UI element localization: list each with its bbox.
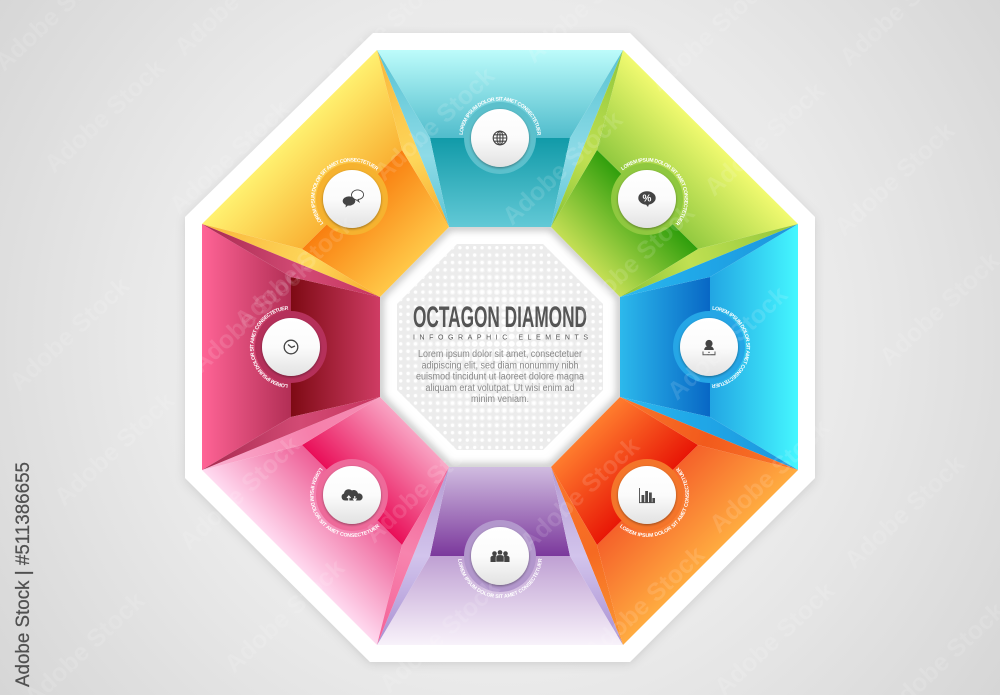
watermarks: Adobe Stock (4, 272, 135, 396)
badge: person (673, 306, 750, 388)
icon: person at laptop (702, 340, 716, 355)
watermarks: Adobe Stock (174, 431, 305, 555)
badge: globe: LOREM IPSUM DOLOR SIT AMET CONSECTETUER (459, 96, 541, 136)
stock id label: Adobe Stock | #511386655 (13, 462, 34, 687)
icon: people (490, 550, 510, 562)
centre panel (380, 227, 620, 467)
subtitle: INFOGRAPHIC ELEMENTS (413, 334, 588, 342)
panel: green top-right (551, 50, 798, 297)
body text: euismod tincidunt ut laoreet dolore magna (416, 372, 584, 382)
watermarks: Adobe Stock (39, 54, 170, 178)
icon: chat bubbles (343, 190, 364, 208)
body text: aliquam erat volutpat. Ut wisi enim ad (426, 383, 574, 394)
watermarks: Adobe Stock (662, 281, 793, 405)
icon: globe (493, 131, 507, 145)
watermarks: Adobe Stock (569, 199, 700, 323)
badge: cloud: LOREM IPSUM DOLOR SIT AMET CONSECTETUER (310, 468, 380, 537)
body text: minim veniam. (471, 394, 529, 405)
watermarks: Adobe Stock (164, 95, 295, 219)
panel: yellow top-left (202, 50, 449, 297)
body text: Lorem ipsum dolor sit amet, consectetuer (418, 349, 583, 360)
badge: clock: LOREM IPSUM DOLOR SIT AMET CONSECTETUER (250, 306, 288, 388)
icon: bar chart (639, 488, 655, 503)
watermarks: Adobe Stock (704, 414, 835, 538)
watermarks: Adobe Stock (579, 541, 710, 665)
badge: chat: LOREM IPSUM DOLOR SIT AMET CONSECTETUER (310, 158, 378, 226)
watermarks: Adobe Stock (49, 387, 180, 511)
watermarks: Adobe Stock (497, 106, 628, 230)
badge: globe (459, 96, 541, 174)
watermarks: Adobe Stock (699, 77, 830, 201)
watermarks: Adobe Stock (514, 432, 645, 556)
watermarks: Adobe Stock (374, 574, 505, 695)
icon: cloud (342, 489, 363, 500)
badge: people (458, 520, 542, 598)
watermarks: Adobe Stock (359, 424, 490, 548)
watermarks: Adobe Stock (369, 62, 500, 186)
watermarks: Adobe Stock (839, 450, 970, 574)
badge: percent: LOREM IPSUM DOLOR SIT AMET CONSECTETUER (620, 158, 688, 226)
title: OCTAGON DIAMOND (413, 301, 587, 334)
panel: pink bottom-left (202, 397, 449, 645)
badge: people: LOREM IPSUM DOLOR SIT AMET CONSECTETUER (458, 558, 542, 598)
centre inner shadow (380, 227, 620, 467)
white octagon base (185, 33, 815, 662)
watermarks: Adobe Stock (229, 210, 360, 334)
body text: adipiscing elit, sed diam nonummy nibh (422, 360, 578, 371)
panel: teal top (377, 50, 623, 227)
badge: bars: LOREM IPSUM DOLOR SIT AMET CONSECTETUER (620, 467, 689, 537)
panel: blue right (620, 224, 798, 470)
watermarks: Adobe Stock (186, 254, 317, 378)
icon: percent bubble: % (643, 194, 652, 205)
panel: crimson left (202, 224, 380, 470)
panel: purple bottom (377, 467, 623, 645)
halftone dot octagon (397, 244, 603, 450)
body text (416, 349, 584, 405)
badge: person: LOREM IPSUM DOLOR SIT AMET CONSECTETUER (712, 306, 750, 388)
watermarks: Adobe Stock (829, 117, 960, 241)
icon: clock (284, 340, 298, 354)
badge: clock (250, 306, 327, 388)
panel: orange bottom-right (551, 397, 798, 645)
watermarks: Adobe Stock (219, 554, 350, 678)
